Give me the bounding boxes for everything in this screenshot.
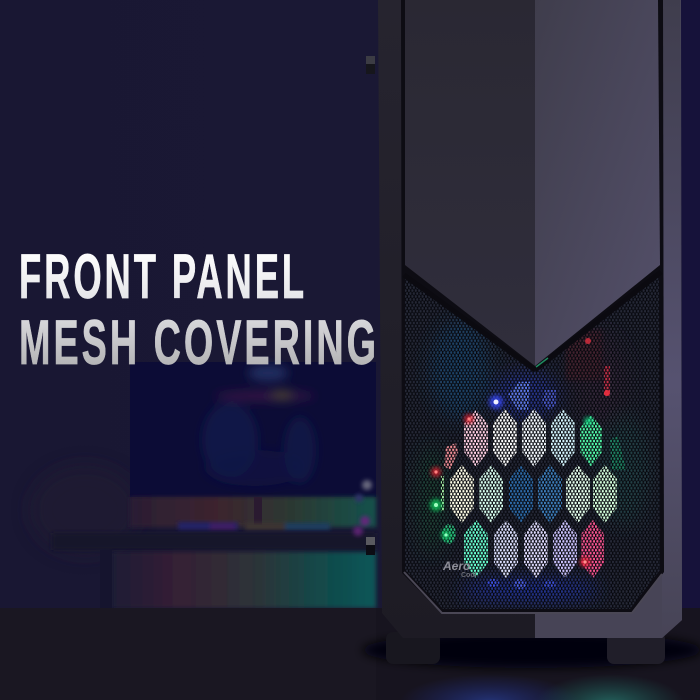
upper panel right facet	[535, 0, 660, 366]
case feet	[386, 636, 665, 664]
computer case	[378, 0, 682, 638]
case shadow on floor	[362, 632, 700, 668]
fan hexagon ring: top row	[464, 409, 602, 467]
upper panel left facet	[405, 0, 535, 366]
title line 2: MESH COVERING	[19, 308, 379, 378]
background: blurred room wall	[16, 450, 130, 570]
V-shaped mesh border	[416, 287, 641, 372]
panel recess shadow	[401, 0, 664, 613]
monitor	[130, 362, 376, 497]
logo	[442, 562, 476, 577]
interior ambient colour	[416, 320, 649, 602]
title	[21, 254, 374, 365]
keyboard glow	[178, 522, 330, 530]
red component bar	[604, 366, 610, 396]
monitor stand	[254, 497, 262, 525]
logo: Aero	[442, 559, 470, 573]
desk top	[52, 533, 376, 550]
light under desk	[112, 552, 376, 608]
mesh frame highlight	[404, 572, 662, 613]
case clips on left side	[366, 56, 375, 555]
LED glows	[430, 338, 610, 567]
logo: Cool	[461, 572, 477, 579]
floor	[0, 608, 700, 700]
mesh panel	[400, 270, 670, 615]
small lit fragments	[441, 382, 626, 589]
mesh dots and lights	[400, 270, 670, 615]
title line 1: FRONT PANEL	[19, 242, 307, 312]
blurred desk scene	[52, 362, 376, 608]
bokeh lights	[353, 480, 372, 536]
desk leg	[100, 550, 112, 608]
fan hexagon ring: bottom row	[464, 520, 604, 578]
wall light behind desk	[130, 497, 376, 527]
right side rail	[662, 0, 682, 638]
case body	[378, 0, 535, 638]
fan hexagon ring: middle row	[450, 465, 617, 523]
